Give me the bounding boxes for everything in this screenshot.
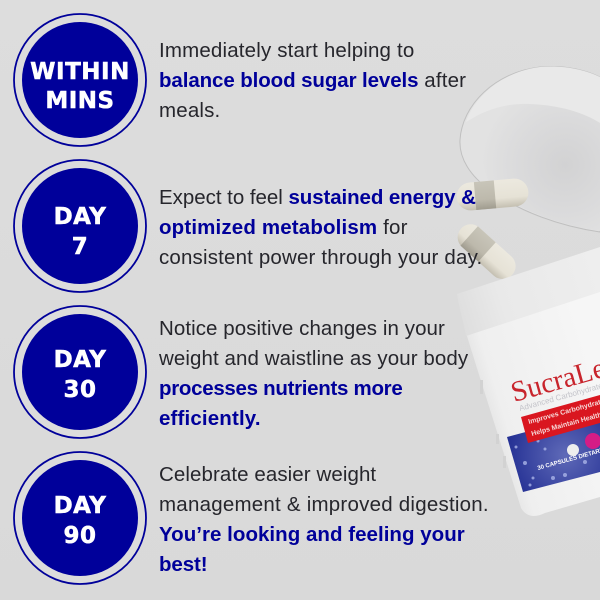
- badge: day 90: DAY: [54, 493, 106, 519]
- text: day 7: sustained energy &: [288, 186, 476, 209]
- text: day 30: efficiently.: [159, 407, 261, 430]
- badge: day 90: 90: [63, 523, 97, 549]
- badge: day 7: 7: [72, 234, 88, 260]
- text: day 90: best!: [159, 553, 207, 576]
- bottle neck: [457, 247, 600, 336]
- bottle side print: [480, 380, 506, 468]
- text: day 30: processes nutrients more: [159, 377, 402, 400]
- badge: day 90: [14, 452, 146, 584]
- text: day 90: management & improved digestion.: [159, 493, 489, 516]
- badge: day 30: DAY: [54, 347, 106, 373]
- bottle red band: [521, 395, 600, 443]
- text: within mins: after: [418, 69, 466, 92]
- text: within mins: balance blood sugar levels: [159, 69, 418, 92]
- bottle molecule graphic: [567, 433, 600, 456]
- badge: day 7: [14, 160, 146, 292]
- badge: day 7: DAY: [54, 204, 106, 230]
- badge: within mins: MINS: [45, 88, 115, 114]
- illustration: open jar lid: [460, 67, 600, 232]
- badge: day 30: 30: [63, 377, 97, 403]
- text: day 7: Expect to feel: [159, 186, 288, 209]
- illustration: capsule one: [455, 177, 530, 212]
- bottle blue band: [507, 412, 600, 492]
- text: day 90: You’re looking and feeling your: [159, 523, 465, 546]
- text: day 90: Celebrate easier weight: [159, 463, 376, 486]
- badge: within mins: [14, 14, 146, 146]
- text: within mins: meals.: [159, 99, 220, 122]
- illustration: capsule two: [452, 219, 521, 284]
- bottle label speckles: [514, 440, 587, 486]
- text: day 7: optimized metabolism: [159, 216, 377, 239]
- text: within mins: Immediately start helping to: [159, 39, 414, 62]
- text: day 7: for: [377, 216, 408, 239]
- badge: within mins: WITHIN: [30, 59, 130, 85]
- text: day 30: Notice positive changes in your: [159, 317, 445, 340]
- text: day 30: weight and waistline as your body: [158, 347, 469, 370]
- illustration: supplement bottle: [457, 247, 600, 516]
- badge: day 30: [14, 306, 146, 438]
- text: day 7: consistent power through your day.: [159, 246, 482, 269]
